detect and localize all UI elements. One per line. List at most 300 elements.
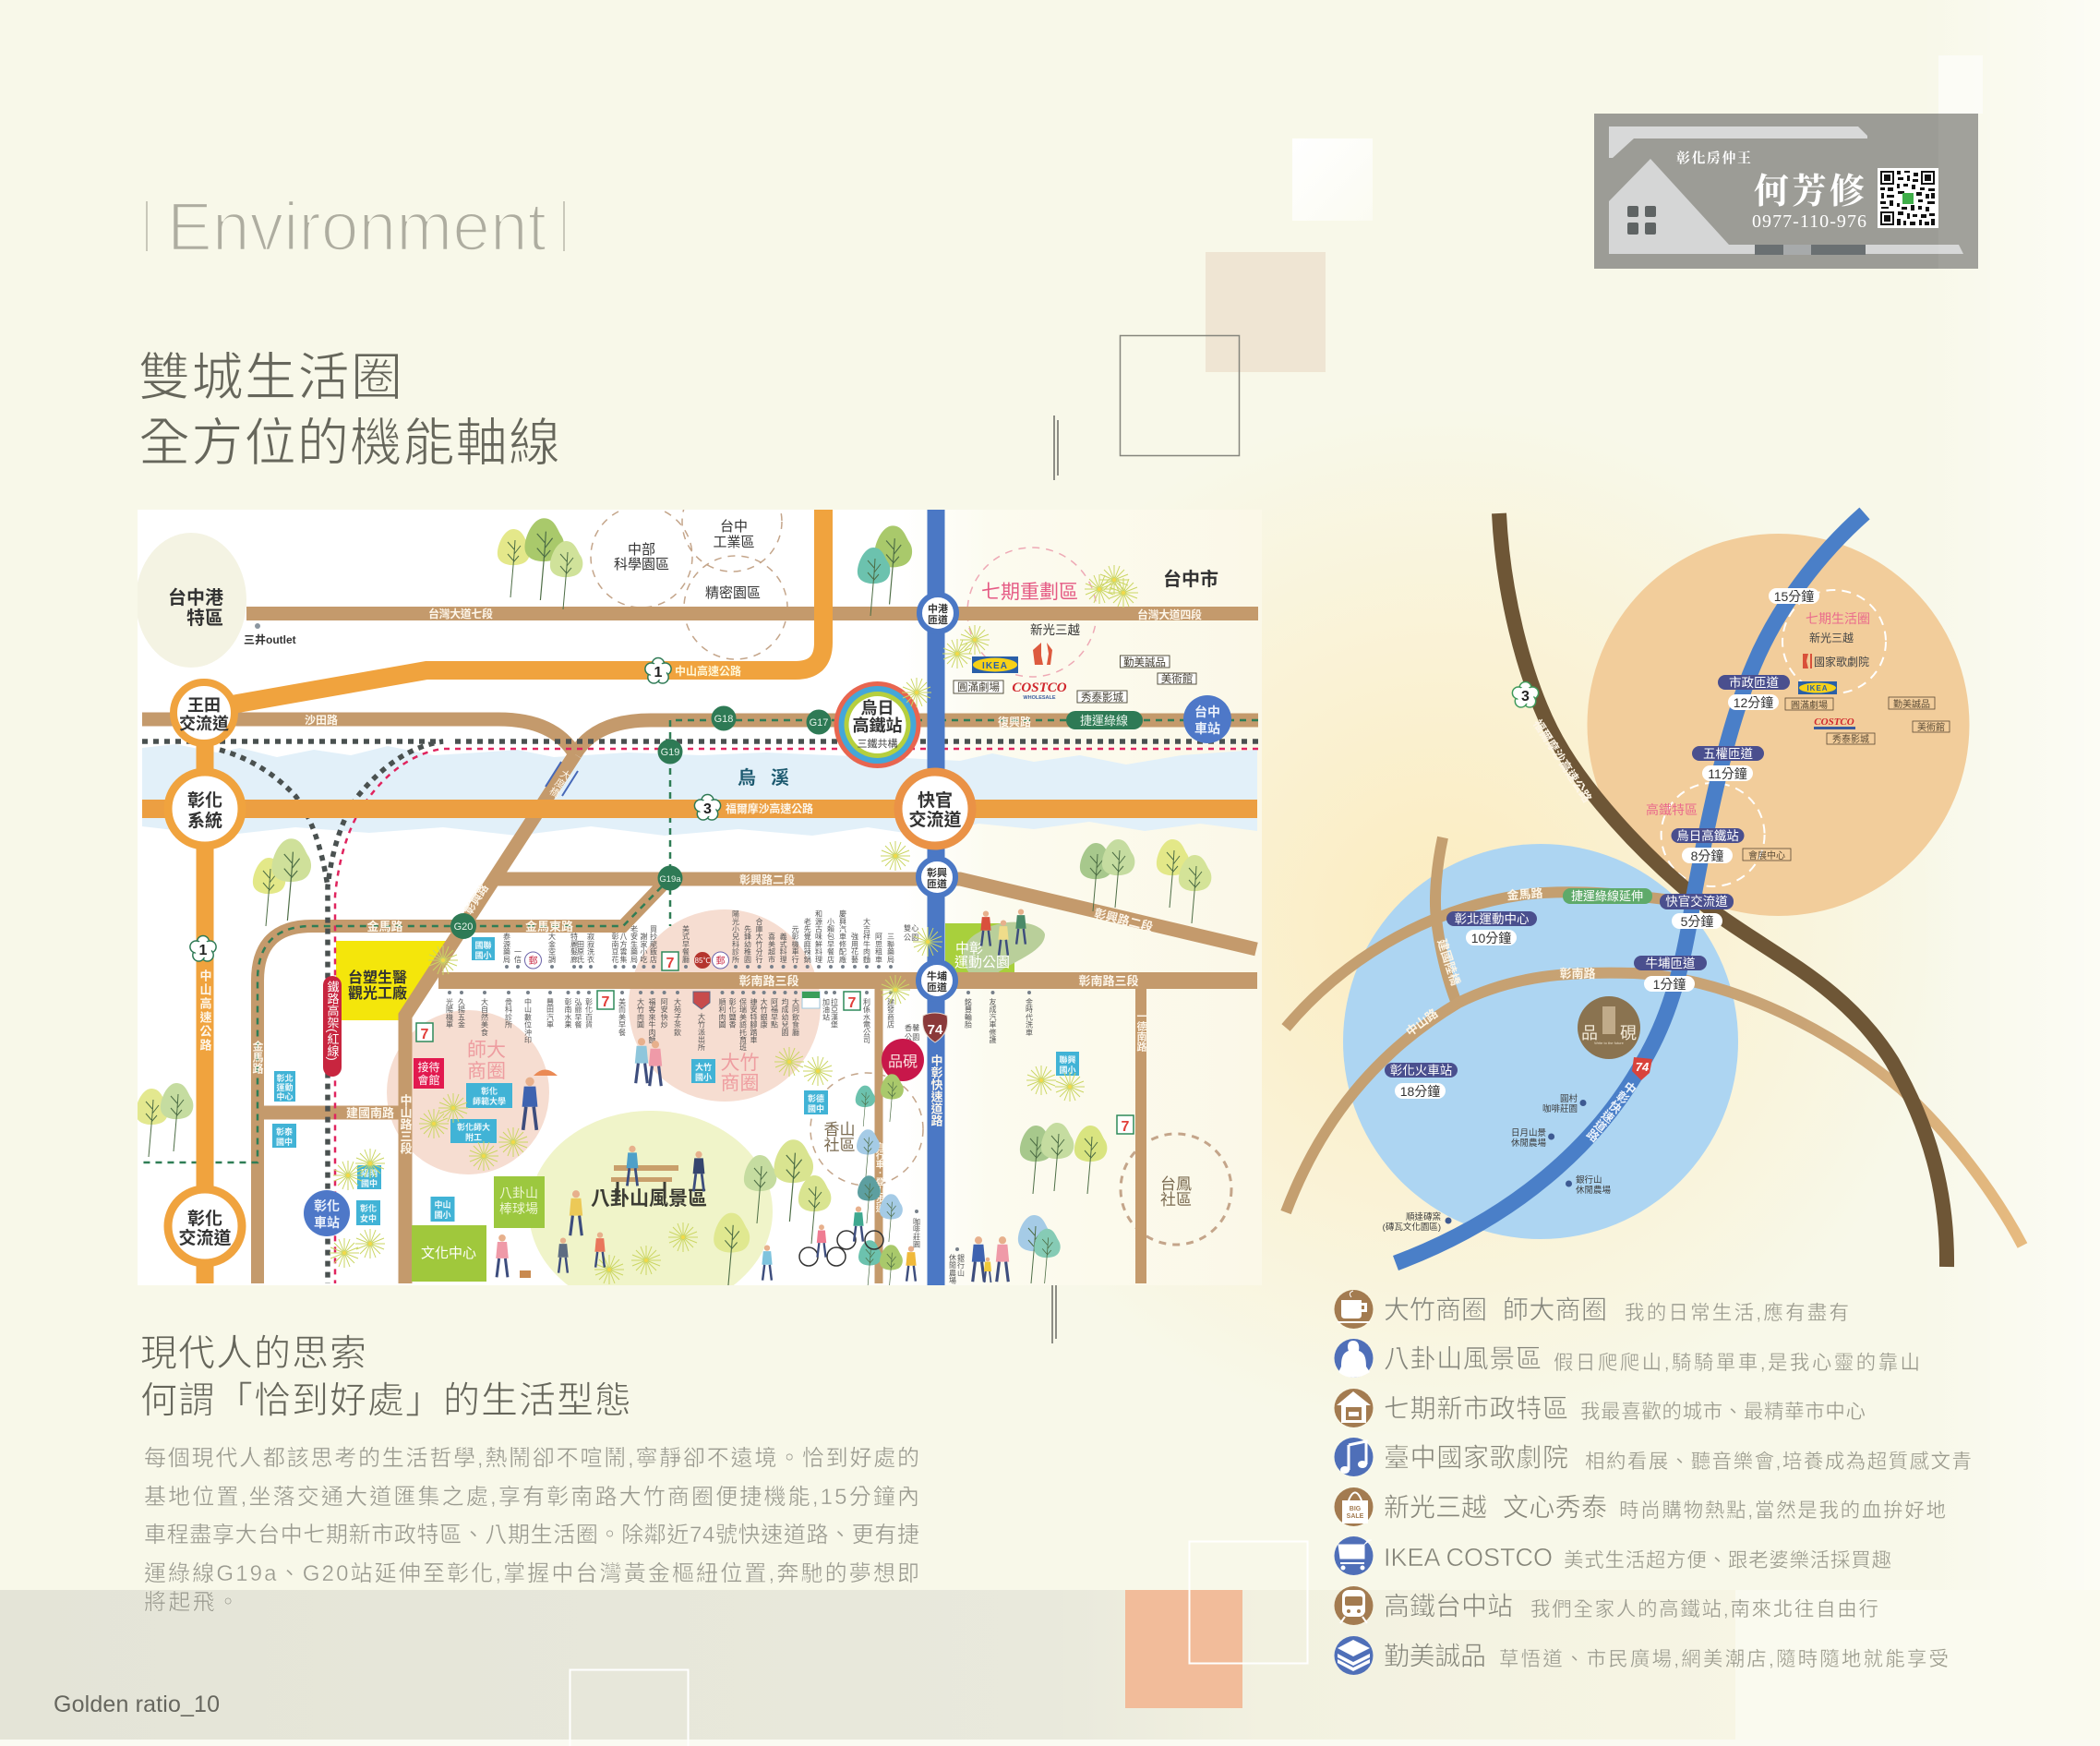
shops south of road: 彰化百貨 (585, 997, 593, 1030)
expressway 74 (1396, 513, 1865, 1263)
shops south of road: 利係水電公司 (862, 997, 871, 1043)
shops north of road: 特麗髮廊 (570, 932, 578, 964)
road labels: 復興路 (998, 715, 1031, 729)
legend: lifestyle list (1335, 1290, 1972, 1675)
district labels: 大竹 (720, 1053, 759, 1074)
travel time pills: 11分鐘 (1708, 766, 1747, 781)
subheading: modern thinking (140, 1333, 631, 1421)
travel time pills: 五權匝道 (1703, 747, 1753, 761)
railway station labels: 台中 (1194, 704, 1220, 719)
diagram landmarks: 國家歌劇院 (1814, 655, 1869, 668)
fold staples (1052, 415, 1058, 1343)
school boxes: 運動 (276, 1082, 294, 1092)
people illustrations (496, 909, 1026, 1282)
district labels: 中部 (628, 542, 655, 558)
district labels: 運動公園 (954, 955, 1010, 970)
legend icon: shopping bag: BIG (1350, 1506, 1362, 1512)
seventh zone landmarks: IKEA (982, 661, 1008, 671)
decorative square: outline (1121, 336, 1239, 456)
road labels: 中彰快速道路 (929, 1054, 943, 1126)
metro green line pill: 捷運綠線 (1080, 714, 1128, 728)
school boxes: 師範大學 (473, 1096, 506, 1106)
shops north of road: 阿思租車 (875, 933, 882, 964)
legend row 5: 新光三越 (1384, 1493, 1487, 1522)
school boxes: 聯興 (1059, 1054, 1076, 1065)
leisure farm points: 日月山景 (1511, 1128, 1546, 1138)
school boxes: 彰泰 (276, 1126, 293, 1137)
decorative square: peach (1125, 1590, 1242, 1708)
freeway badges (190, 657, 721, 961)
legend row 5 (1384, 1493, 1946, 1522)
leisure farm points: 咖啡莊園 (1542, 1103, 1578, 1114)
shops north of road: 義式料理 (779, 932, 787, 963)
railway station labels: 彰化 (314, 1198, 340, 1213)
freeway 3 (1499, 513, 1947, 1267)
shops south of road: 銘豐輪胎 (964, 997, 973, 1030)
school boxes: 國小 (474, 950, 492, 960)
baseball field (494, 1176, 545, 1228)
culture centre (412, 1225, 486, 1282)
interchange labels (178, 696, 962, 1248)
district labels: 科學園區 (614, 556, 669, 572)
blue expressway (927, 510, 945, 1285)
leisure farm points: (磚瓦文化園區) (1383, 1222, 1441, 1233)
shops south of road: 大苑子茶飲 (674, 997, 681, 1037)
legend row 2: 八卦山風景區 (1384, 1344, 1542, 1373)
freeway badge numbers: 1 (654, 665, 663, 680)
shops south of road: 建發商店 (886, 997, 895, 1030)
shops north of road: 謝家小吃 (640, 932, 648, 963)
shops north of road: 和源古味鮮料理 (814, 910, 823, 963)
shops south of road: 銀行山 (956, 1253, 966, 1277)
travel time pills: 彰化火車站 (1390, 1063, 1452, 1078)
district labels: 台塑生醫 (348, 969, 407, 986)
metro station labels: G20 (454, 921, 473, 933)
elevated rail pill: 鐵路高架(紅線) (325, 980, 340, 1061)
diagram landmarks (1646, 611, 1950, 861)
blue circle: Changhua area (1343, 844, 1738, 1239)
agent business card: 0977-110-976 (1752, 211, 1866, 232)
legend row 2: 假日爬爬山,騎騎單車,是我心靈的靠山 (1554, 1352, 1920, 1374)
railway stations (304, 695, 1231, 1236)
legend row 4: 臺中國家歌劇院 (1384, 1443, 1568, 1472)
yellow factory block (336, 941, 446, 1020)
district labels: 中彰 (955, 940, 983, 957)
school boxes: 國中 (808, 1103, 824, 1114)
shops south of road (445, 923, 1034, 1285)
shops south of road: 雙心 (904, 923, 918, 933)
metro green line pill (1066, 711, 1143, 729)
leisure farm points: 銀行山 (1576, 1174, 1602, 1186)
road labels: 一德南路 (1135, 1011, 1146, 1053)
school boxes: 彰化 (481, 1086, 498, 1096)
decorative square: white outline bottom (570, 1669, 689, 1746)
shops north of road: 泰源藥局 (502, 932, 511, 964)
high speed rail station (834, 681, 921, 768)
diagram landmarks: 勤美誠品 (1893, 698, 1930, 710)
road labels on diagram: 福爾摩沙高速公路 (1530, 717, 1594, 805)
interchange labels: 系統 (187, 810, 222, 831)
shops north of road: 一信 (513, 948, 522, 964)
port special zone (136, 533, 246, 668)
shops south of road: 公園 (905, 1033, 919, 1042)
shops south of road: 保瑞美語托育班 (738, 997, 748, 1052)
project marker (882, 1039, 924, 1081)
school boxes: 國小 (695, 1072, 712, 1082)
subheading: modern thinking: 何謂「恰到好處」的生活型態 (140, 1380, 631, 1421)
legend row 5: 時尚購物熱點,當然是我的血拚好地 (1619, 1499, 1946, 1522)
leisure farm points (1383, 1093, 1612, 1233)
school boxes: 中山 (434, 1199, 451, 1210)
leisure farm points: 休閒農場 (1511, 1138, 1546, 1149)
district labels: 新光三越 (1030, 623, 1080, 637)
shops north of road: 先鋒幼稚園 (744, 924, 751, 964)
convenience store icons: 7 (421, 1027, 429, 1042)
railway station labels (314, 704, 1220, 1230)
legend icon: shopping bag (1335, 1487, 1374, 1526)
legend row 3 (1384, 1394, 1866, 1423)
legend row 1: 我的日常生活,應有盡有 (1625, 1301, 1849, 1324)
road labels: 中山路三段 (399, 1093, 412, 1155)
travel time pills: 彰北運動中心 (1455, 911, 1530, 926)
interchange labels: 交流道 (179, 714, 229, 733)
district labels: 台中 (720, 519, 748, 535)
shops north of road: 合庫大竹分行 (755, 917, 763, 964)
rail lines (142, 720, 1258, 1283)
road labels: 彰南路三段 (1078, 974, 1139, 988)
seventh zone landmarks: COSTCO (1012, 680, 1067, 695)
diagram landmarks: 圓滿劇場 (1791, 699, 1828, 711)
shops north of road: 小賴包早餐店 (827, 918, 834, 964)
shops south of road: 大同飲食廳 (792, 997, 799, 1037)
district labels: 精密園區 (705, 585, 761, 601)
river label: 烏溪 (738, 767, 789, 789)
decorative square: white (1292, 138, 1373, 221)
tan roads (142, 613, 1258, 1283)
legend row 8: 草悟道、市民廣場,網美潮店,隨時隨地就能享受 (1499, 1648, 1949, 1670)
shops south of road: 友成汽車修護 (989, 997, 997, 1044)
legend row 4: 相約看展、聽音樂會,培養成為超質感文青 (1585, 1451, 1972, 1473)
shops north of road: 寂寂洗衣 (587, 932, 594, 964)
shops south of road: 大自然美食 (480, 997, 489, 1037)
travel time pills (1385, 588, 1819, 1099)
district labels: 香山 (823, 1121, 855, 1138)
travel time pills: 8分鐘 (1691, 849, 1723, 863)
shops south of road: 彰南水果 (564, 997, 572, 1030)
shop logo icons (524, 952, 820, 1009)
metro station labels: G19 (661, 747, 679, 758)
shops south of road: 大竹派出所 (698, 1012, 705, 1052)
shida shopping circle (387, 1010, 549, 1174)
convenience store icons: 7 (666, 956, 675, 971)
shops north of road: 陽光小兒科診所 (731, 910, 740, 964)
seventh zone landmarks: 秀泰影城 (1081, 691, 1123, 704)
bridge (546, 762, 578, 800)
trees (136, 518, 1211, 1293)
shops north of road: 彰南豆花 (611, 932, 619, 964)
shop logo icons: 郵 (528, 955, 537, 967)
road labels: 建國南路 (346, 1106, 394, 1120)
shop logo icons: 85℃ (695, 957, 710, 965)
shops south of road: 骨科診所 (504, 998, 513, 1030)
agent business card: 何芳修 (1754, 173, 1865, 211)
legend icon: shopping cart (1335, 1536, 1374, 1575)
diagram landmarks: COSTCO (1814, 716, 1854, 728)
diagram landmarks: 會展中心 (1748, 849, 1785, 861)
ramp labels: 牛埔 (927, 969, 947, 982)
school boxes: 女中 (360, 1213, 377, 1223)
river (142, 744, 1257, 836)
shops south of road: 香馨 (905, 1023, 919, 1032)
road labels: 金馬東路 (525, 920, 573, 933)
metro station labels: G17 (810, 717, 828, 729)
legend icon: shopping bag: SALE (1347, 1513, 1364, 1520)
school boxes: 彰北 (276, 1073, 294, 1083)
school boxes: 附工 (465, 1132, 482, 1142)
district labels: 特區 (186, 608, 223, 629)
project logo: 品硯 (1581, 1024, 1637, 1042)
dashed district circles (591, 472, 1231, 1245)
green line extension pill: 捷運綠線延伸 (1571, 889, 1643, 903)
road labels: 彰興路二段 (739, 873, 795, 886)
school boxes: 彰德 (808, 1093, 824, 1103)
school boxes: 彰化 (360, 1203, 377, 1213)
travel time pills: 10分鐘 (1471, 931, 1511, 945)
project marker: 品硯 (888, 1054, 918, 1070)
reception hall: 接待 (417, 1060, 440, 1074)
legend row 8: 勤美誠品 (1384, 1642, 1486, 1670)
reception hall: 會館 (417, 1073, 440, 1087)
school boxes: 陽明 (361, 1169, 378, 1178)
district labels: 八卦山風景區 (591, 1188, 707, 1210)
shops south of road: 金時代洗車 (1025, 997, 1034, 1037)
highway 74 badge: 74 (1636, 1060, 1650, 1074)
body paragraph: 車程盡享大台中七期新市政特區、八期生活圈。除鄰近74號快速道路、更有捷 (144, 1523, 919, 1547)
shops south of road: 加油站 (822, 997, 831, 1021)
highway 74 badge (1632, 1057, 1652, 1080)
shops north of road: 強用花藝 (851, 932, 858, 964)
decorative square: white outline right (1189, 1542, 1307, 1664)
legend row 7: 我們全家人的高鐵站,南來北往自由行 (1530, 1598, 1878, 1620)
road labels on diagram: 彰南路 (1559, 967, 1596, 981)
road labels: 彰興路 (462, 881, 491, 917)
shops south of road: 久揚五金 (458, 997, 465, 1029)
railway station labels: 車站 (1194, 721, 1220, 736)
interchange labels: 彰化 (187, 789, 222, 811)
district labels (168, 519, 1218, 1210)
legend icon: music (1335, 1438, 1374, 1476)
shops south of road: 美而美早餐 (618, 997, 626, 1037)
high speed rail station: 三鐵共構 (857, 737, 897, 750)
legend icon: person (1335, 1339, 1374, 1378)
diagram landmarks: 秀泰影城 (1832, 733, 1869, 745)
diagram landmarks: 七期生活圈 (1806, 611, 1870, 626)
diagram landmarks: IKEA (1806, 684, 1829, 692)
travel time pills: 牛埔匝道 (1645, 957, 1696, 970)
legend row 2 (1384, 1344, 1920, 1374)
shops south of road: 咖啡莊園 (912, 1217, 921, 1249)
body paragraph (144, 1446, 919, 1615)
seventh zone landmarks: 圓滿劇場 (957, 680, 1000, 693)
orange circle: Taichung area (1588, 534, 1970, 916)
dashed white rings (1662, 590, 1886, 886)
ramp labels (927, 602, 948, 993)
project logo: Write to the future (1594, 1041, 1625, 1045)
shop logo icons: 郵 (716, 955, 726, 967)
shops north of road: 老先覺麻辣鍋 (803, 917, 811, 963)
road labels: 福爾摩沙高速公路 (726, 801, 813, 815)
legend row 3: 我最喜歡的城市、最精華市中心 (1580, 1401, 1866, 1423)
heading: two city lifestyle: 全方位的機能軸線 (138, 414, 560, 472)
shops north of road: 八方雲集 (619, 933, 628, 964)
culture centre: 文化中心 (421, 1246, 476, 1261)
reception hall (414, 1058, 444, 1089)
tan roads (1286, 837, 2022, 1246)
body paragraph: 基地位置,坐落交通大道匯集之處,享有彰南路大竹商圈便捷機能,15分鐘內 (144, 1485, 919, 1510)
shops north of road: 田原氏 (576, 940, 585, 963)
freeway badge numbers (199, 665, 712, 958)
diagram landmarks: 高鐵特區 (1646, 802, 1698, 817)
shops north of road: 慶興汽車修配廠 (838, 909, 847, 964)
road labels: 台灣大道七段 (428, 607, 493, 620)
legend icon: train (1335, 1586, 1374, 1625)
dazhu shopping circle (629, 909, 821, 1102)
freeway 3 badge: 3 (1521, 689, 1530, 704)
legend row 6: IKEA COSTCO (1384, 1543, 1553, 1571)
road labels on diagram: 中山路 (1403, 1006, 1440, 1039)
interchange labels: 快官 (918, 789, 953, 811)
shops south of road: 弘爺早餐 (574, 998, 582, 1030)
interchange circles (168, 682, 972, 1263)
legend row 7: 高鐵台中站 (1384, 1592, 1513, 1620)
travel time pills: 1分鐘 (1653, 977, 1686, 992)
legend icon: house (1335, 1389, 1374, 1427)
leisure farm points: 圓村 (1560, 1093, 1578, 1104)
panel: main area map (136, 472, 1262, 1312)
project logo (1578, 996, 1640, 1059)
pine bursts (330, 565, 1138, 1284)
shops south of road: 阿福早點 (770, 998, 779, 1030)
baseball field: 八卦山 (499, 1186, 538, 1200)
shops south of road: 大竹銀康 (760, 997, 768, 1029)
highway 74 shield (923, 1013, 947, 1042)
legend row 5: 文心秀泰 (1503, 1493, 1607, 1522)
district labels: 七期重劃區 (981, 582, 1078, 603)
road labels (198, 607, 1202, 1213)
convenience store icons: 7 (602, 994, 610, 1010)
school boxes: 大竹 (695, 1062, 712, 1072)
shops south of road: 捷安特腳踏車 (750, 997, 758, 1044)
seventh zone landmarks: 勤美誠品 (1123, 656, 1166, 668)
bridge: 大度橋 (546, 766, 573, 800)
road labels: 沙田路 (305, 713, 338, 727)
shops south of road: 拉亞漢堡 (831, 997, 838, 1029)
interchange labels: 交流道 (178, 1227, 232, 1248)
ramp circles (918, 595, 956, 999)
subheading: modern thinking: 現代人的思索 (140, 1333, 366, 1374)
shops south of road: 福客來牛肉麵 (648, 998, 656, 1044)
legend icon: coffee (1335, 1290, 1374, 1329)
convenience store icons: 7 (848, 995, 857, 1011)
school boxes: 國中 (361, 1178, 378, 1188)
panel: travel time diagram (1286, 513, 2022, 1267)
teepee dots for shops (450, 967, 1029, 1249)
travel time pills: 5分鐘 (1681, 914, 1713, 929)
district labels: 三井outlet (244, 632, 296, 646)
metro station labels: G18 (714, 714, 733, 725)
high speed rail station: 高鐵站 (853, 716, 903, 735)
shops south of road: 中山數位沖印 (524, 997, 532, 1044)
district labels: 師大 (467, 1040, 506, 1061)
freeway 3 badge (1512, 681, 1539, 707)
travel time pills: 12分鐘 (1734, 695, 1773, 710)
convenience store icons (416, 952, 1134, 1135)
shops north of road: 喜美超市 (768, 932, 775, 964)
school boxes: 中心 (276, 1091, 294, 1102)
page number: Golden ratio_10 (54, 1692, 220, 1717)
heading: two city lifestyle: 雙城生活圈 (138, 348, 402, 406)
district labels: 社區 (1160, 1191, 1192, 1209)
road labels: 金馬路 (251, 1040, 264, 1074)
road labels: 彰興路二段 (1093, 906, 1154, 934)
district labels: 商圈 (720, 1073, 759, 1094)
shops south of road: 豐田汽車 (546, 997, 554, 1030)
ramp labels: 匝道 (927, 877, 947, 890)
convenience store icons: 7 (1122, 1119, 1130, 1135)
legend icon: books (1335, 1636, 1374, 1675)
school boxes: 彰化師大 (457, 1122, 490, 1132)
title: Environment: Environment (167, 188, 546, 265)
seventh zone landmarks: 美術館 (1161, 672, 1193, 685)
legend row 8 (1384, 1642, 1949, 1670)
expressway label on diagram: 中彰快速道路 (1583, 1078, 1638, 1144)
leisure farm points: 休閒農場 (1576, 1185, 1612, 1196)
road labels: 中山高速公路 (198, 969, 212, 1053)
ramp labels: 彰興 (927, 866, 947, 879)
shops north of road: 老安生藥局 (630, 924, 639, 964)
travel time pills: 快官交流道 (1665, 894, 1728, 909)
shops north of road: 大金空調 (548, 932, 556, 964)
body paragraph: 每個現代人都該思考的生活哲學,熱鬧卻不喧鬧,寧靜卻不遠境。恰到好處的 (144, 1446, 919, 1471)
leisure farm points: 順達磚窯 (1406, 1211, 1441, 1222)
legend row 3: 七期新市政特區 (1384, 1394, 1568, 1423)
shops north of road: 美式早餐廳 (681, 924, 690, 964)
road labels: 中山高速公路 (675, 664, 741, 678)
metro station labels: G19a (659, 874, 681, 885)
shops south of road: 大竹肉圓 (637, 997, 644, 1030)
school boxes (272, 937, 1079, 1225)
shops north of road: 大吉祥牛肉麵 (862, 917, 871, 964)
travel time pills: 烏日高鐵站 (1676, 828, 1739, 843)
ramp labels: 中港 (928, 602, 948, 615)
shops north of road: 元彰機車行 (791, 925, 799, 964)
district labels: 社區 (823, 1137, 855, 1154)
road labels: 彰南路三段 (738, 974, 799, 988)
seventh zone landmarks (954, 643, 1196, 704)
legend row 6 (1384, 1543, 1891, 1571)
shops south of road: 順利肉圓 (718, 998, 726, 1030)
legend row 1: 師大商圈 (1503, 1295, 1607, 1324)
agent business card: 彰化房仲王 (1676, 150, 1751, 166)
travel time pills: 18分鐘 (1400, 1084, 1440, 1099)
freeway badge numbers: 1 (199, 943, 208, 958)
diagram landmarks: 美術館 (1917, 721, 1945, 733)
shops north of road (502, 909, 895, 964)
high speed rail station: 烏日 (860, 699, 894, 717)
shops south of road: 光陽機車 (445, 997, 454, 1030)
road labels: 台灣大道四段 (1137, 608, 1202, 621)
legend row 1 (1384, 1295, 1849, 1324)
